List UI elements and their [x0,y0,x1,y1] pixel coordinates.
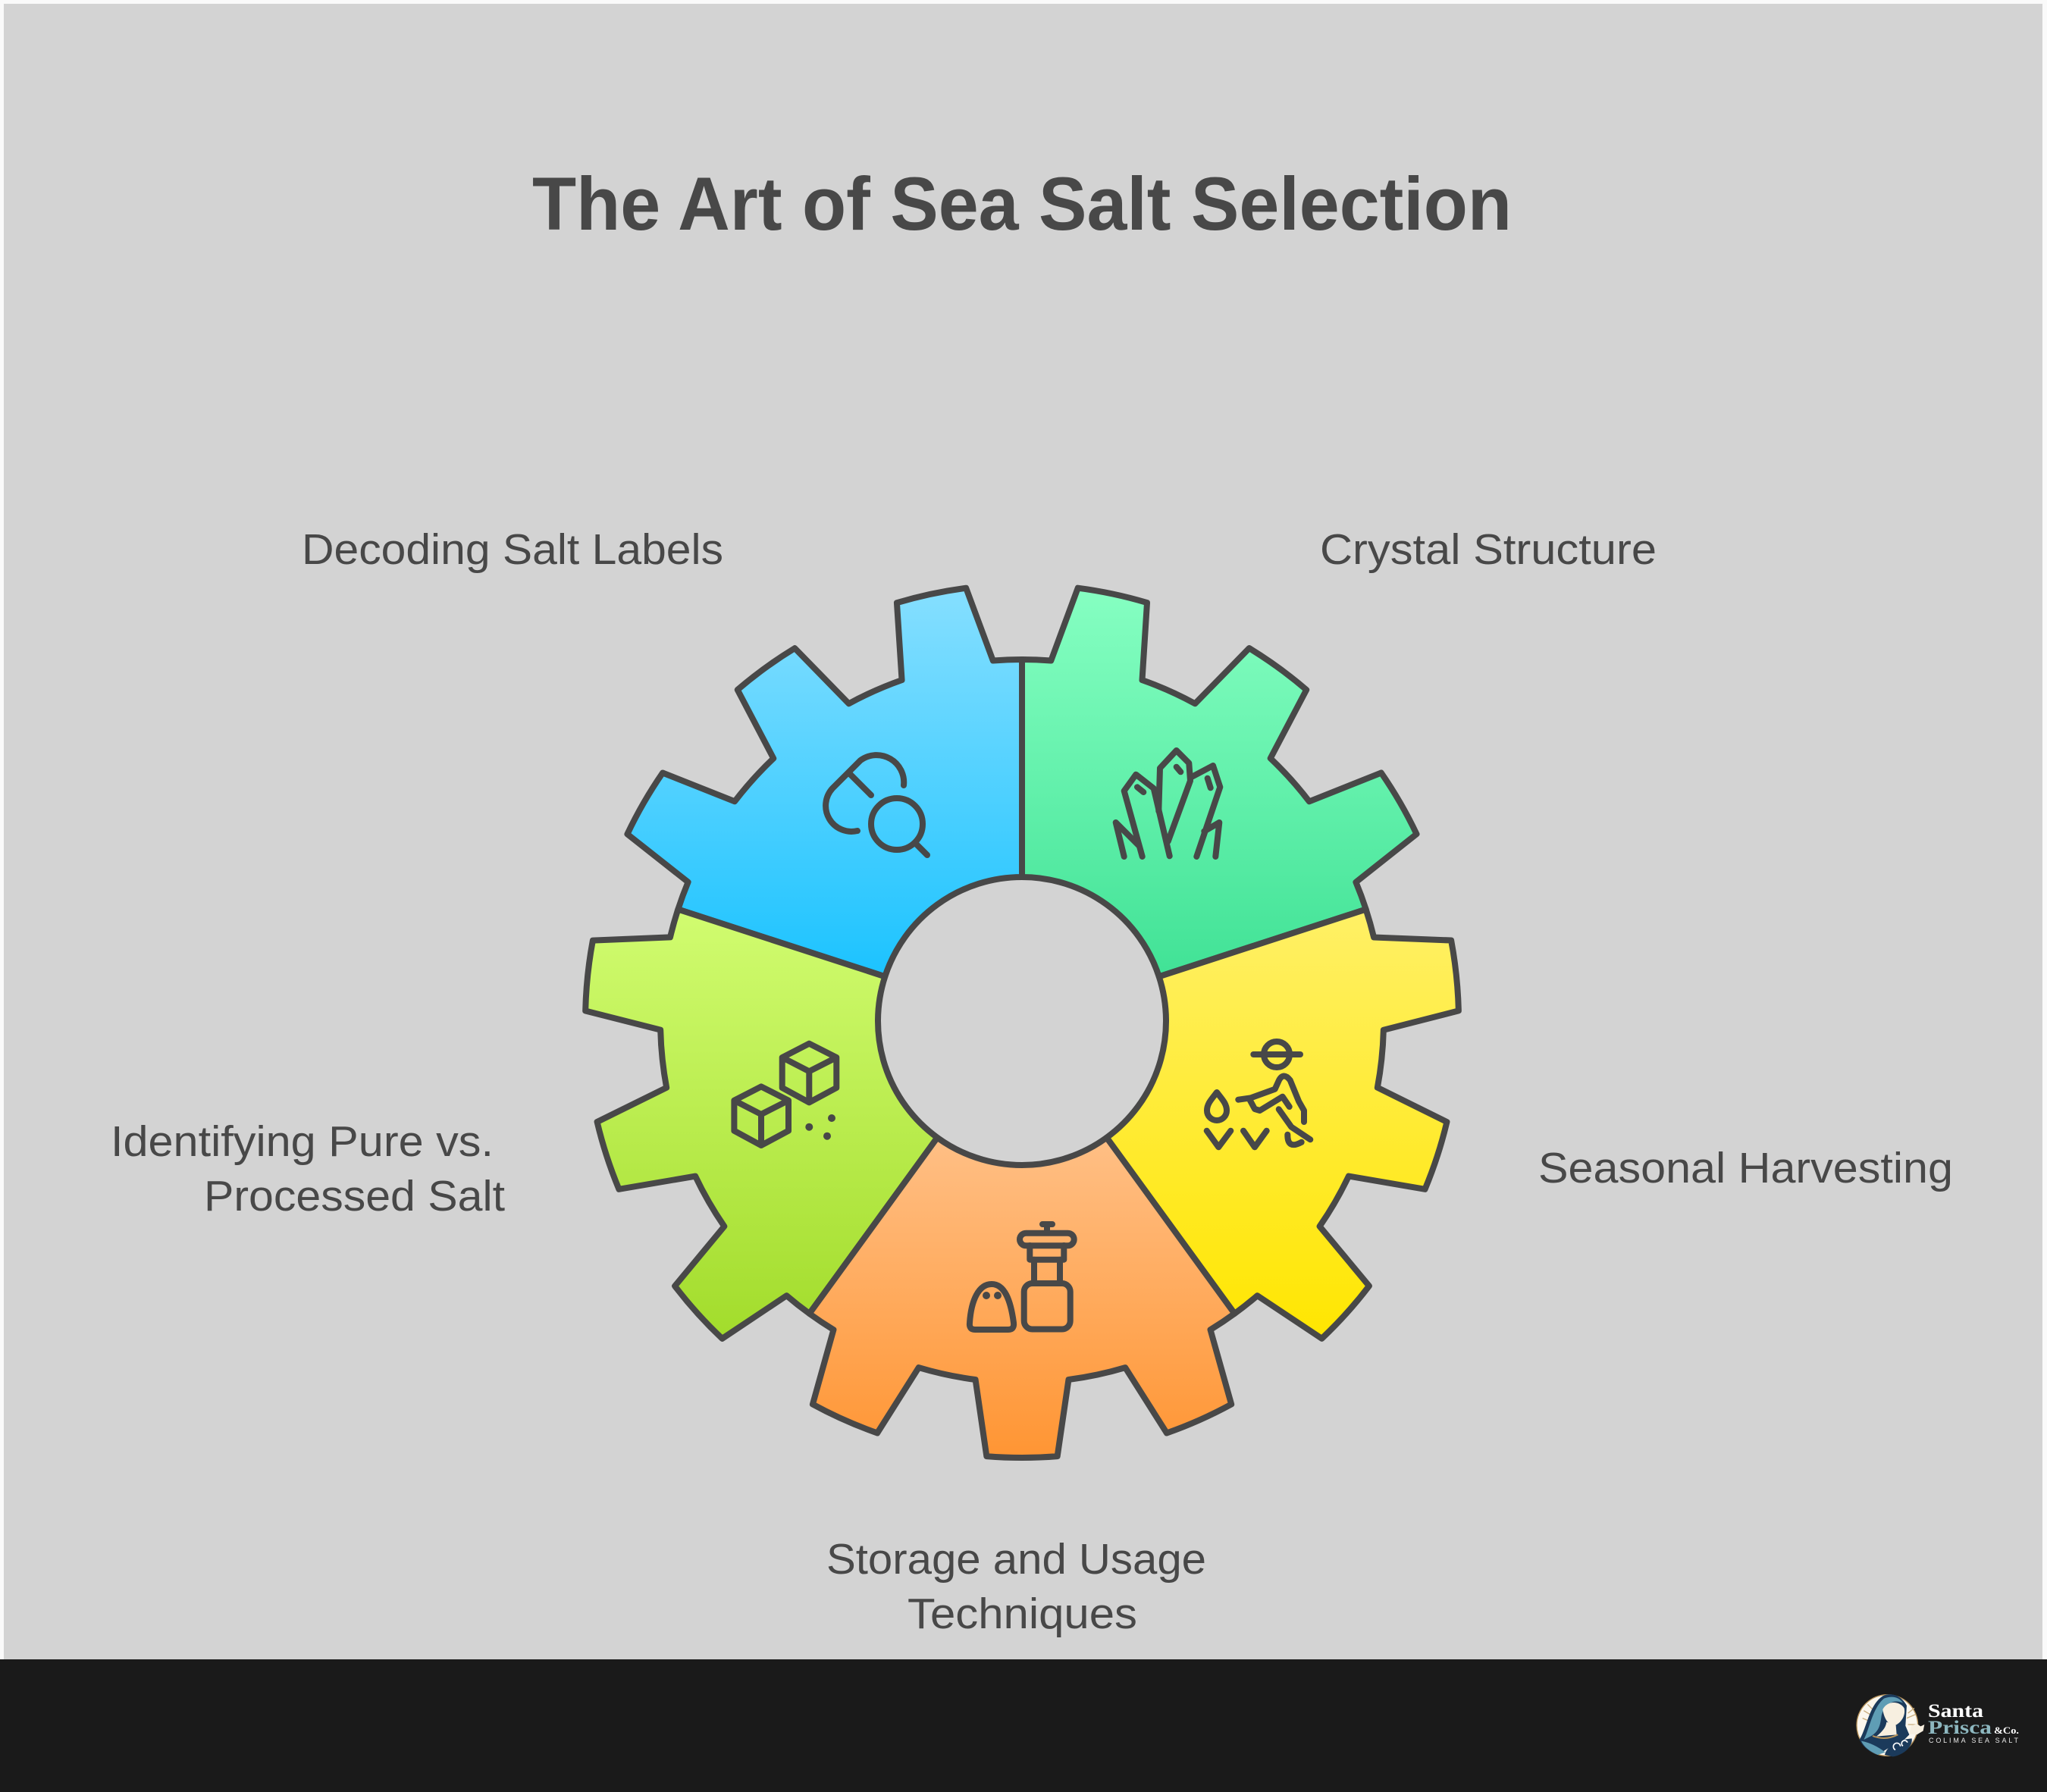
label: Identifying Pure vs. Processed Salt [111,1117,505,1220]
gear segment: Crystal Structure [1022,588,1416,976]
label: Decoding Salt Labels: Decoding Salt Labels [302,525,723,574]
footer bar [0,1659,2047,1792]
label: Storage and Usage Techniques: Storage and Usage [826,1535,1206,1584]
gear chart [448,512,1556,1603]
icon: crystals [1116,750,1220,857]
logo wordmark: and Co.: &Co. [1994,1725,2019,1736]
gear segment: Seasonal Harvesting [1064,887,1556,1383]
logo wordmark: Santa: Santa [1928,1701,1984,1722]
logo emblem [1857,1694,1924,1756]
label: Storage and Usage Techniques [826,1535,1206,1638]
icon: salt shaker and grinder [970,1224,1074,1330]
icon: salt harvester [1207,1042,1310,1147]
logo tagline: COLIMA SEA SALT [1929,1737,2018,1744]
icon: pill and magnifier [826,755,927,855]
icon: salt cubes [734,1044,836,1145]
title: The Art of Sea Salt Selection [532,161,1512,246]
logo wordmark: Prisca: Prisca [1928,1718,1992,1738]
label: Identifying Pure vs. Processed Salt: Identifying Pure vs. [111,1117,494,1166]
gear segment: Decoding Salt Labels [610,512,1102,1007]
label: Seasonal Harvesting: Seasonal Harvesting [1538,1144,1953,1192]
gear segment: Storage and Usage Techniques [729,1057,1277,1603]
label: Storage and Usage Techniques: Techniques [908,1590,1137,1638]
label: Crystal Structure: Crystal Structure [1320,525,1657,574]
logo: Santa Prisca and Co. [1857,1694,2019,1756]
gear segment: Identifying Pure vs. Processed Salt [448,826,995,1371]
label: Identifying Pure vs. Processed Salt: Processed Salt [204,1172,505,1220]
